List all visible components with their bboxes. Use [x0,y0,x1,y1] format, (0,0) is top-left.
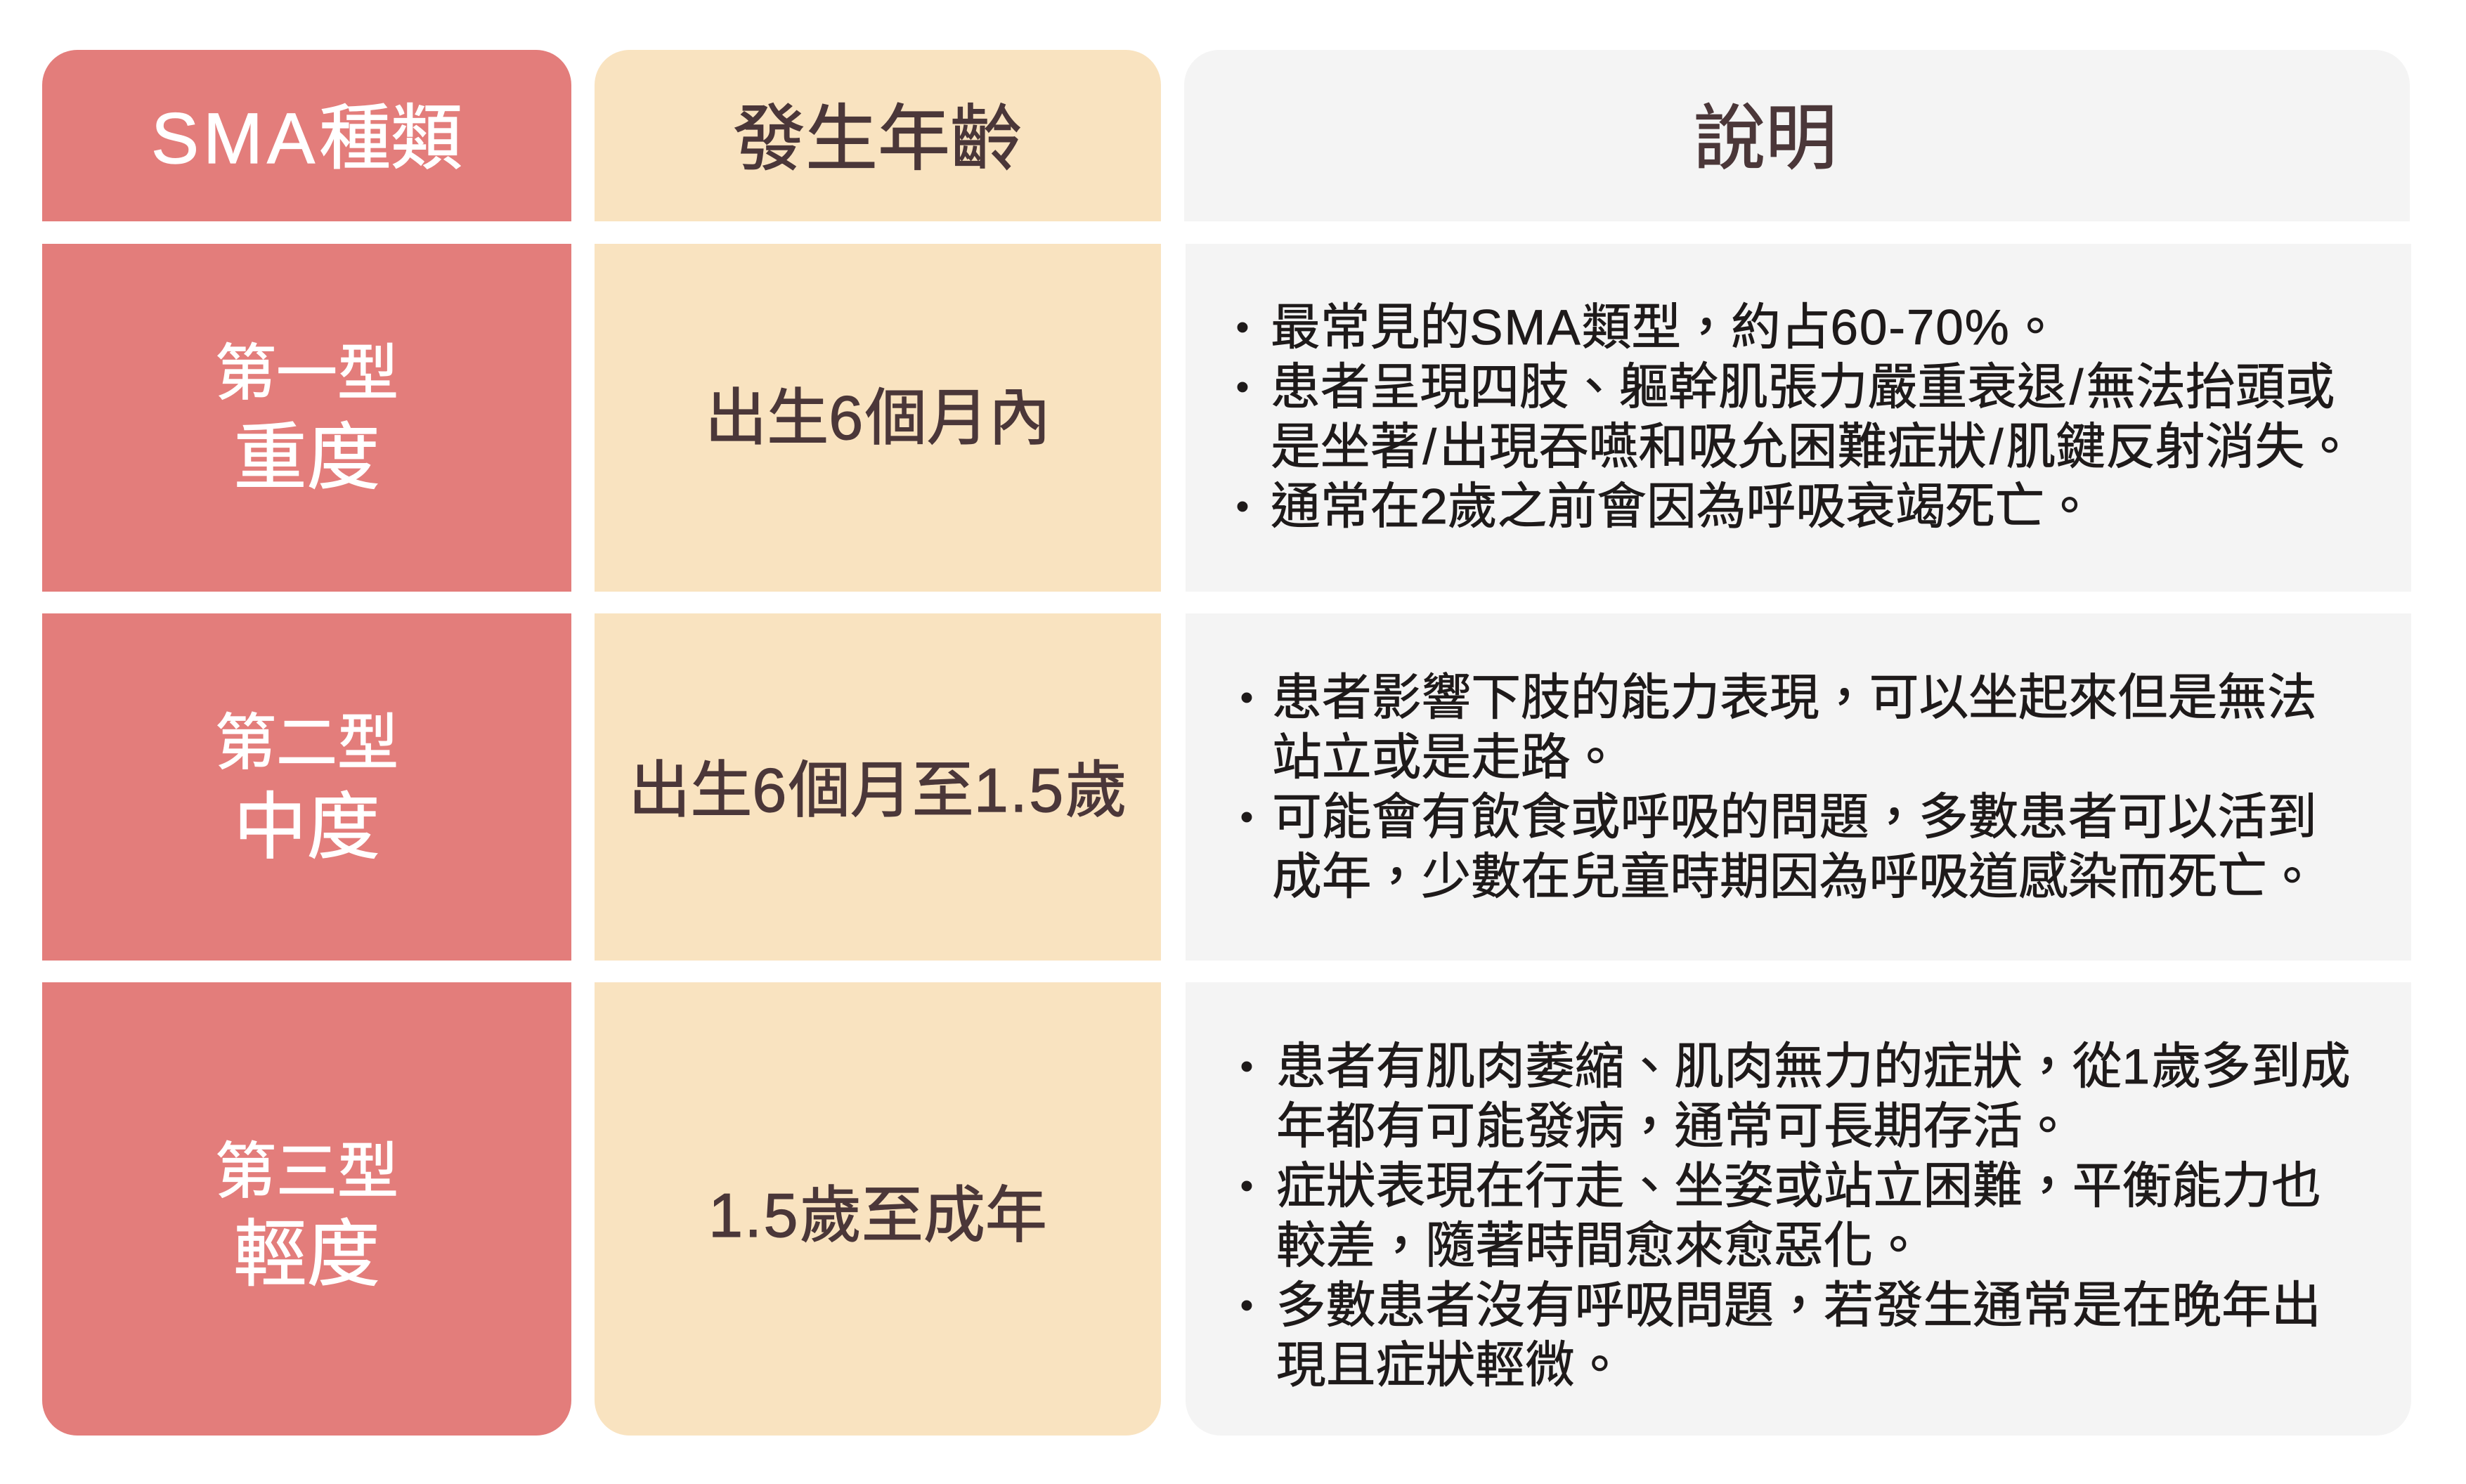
header: SMA types [42,50,571,221]
type 2 description text: 成年，少數在兒童時期因為呼吸道感染而死亡。 [1272,850,2317,905]
panel: type 3 description: • [1240,1046,1253,1087]
type 1 description text: 是坐著/出現吞嚥和吸允困難症狀/肌鍵反射消失。 [1271,419,2354,475]
type 1 age text: 出生6個月內 [705,383,1051,453]
type 1 severity: 重度 [233,417,379,499]
type 3 description text [1240,1039,2351,1393]
panel: type 1 label [42,244,571,592]
panel: type 2 description: • [1240,677,1253,718]
type 3 description text: 較差，隨著時間愈來愈惡化。 [1276,1218,1923,1274]
panel: type 2 age [595,613,1161,961]
heading: description: 說明 [1694,98,1837,178]
panel: type 3 description: • [1240,1285,1253,1326]
type 1 description text [1236,300,2354,535]
type 3 description text: 多數患者沒有呼吸問題，若發生通常是在晚年出 [1276,1278,2321,1334]
type 2 description text [1240,670,2317,905]
heading: SMA types: SMA種類 [151,98,462,178]
panel: type 3 description: • [1240,1166,1253,1206]
type 3 description text: 症狀表現在行走、坐姿或站立困難，平衡能力也 [1276,1159,2321,1214]
header: age of onset [595,50,1161,221]
type 3 age text: 1.5歲至成年 [708,1180,1047,1250]
panel: type 1 description: • [1236,307,1249,348]
type 3 name: 第三型 [215,1138,398,1206]
type 1 name: 第一型 [215,339,398,408]
panel: type 2 description: • [1240,797,1253,838]
type 3 description text: 現且症狀輕微。 [1276,1338,1625,1393]
type 2 name: 第二型 [215,709,398,777]
type 3 severity: 輕度 [233,1214,379,1296]
type 2 description text: 可能會有飲食或呼吸的問題，多數患者可以活到 [1272,790,2317,845]
header: description [1184,50,2410,221]
panel: type 3 age [595,982,1161,1436]
panel: type 2 label [42,613,571,961]
type 1 description text: 患者呈現四肢、軀幹肌張力嚴重衰退/無法抬頭或 [1271,360,2335,415]
panel: type 1 description [1186,244,2411,592]
panel: type 1 age [595,244,1161,592]
type 3 description text: 患者有肌肉萎縮、肌肉無力的症狀，從1歲多到成 [1276,1039,2351,1095]
type 2 severity: 中度 [233,787,379,868]
panel: type 3 description [1186,982,2411,1436]
panel: type 1 description: • [1236,486,1249,527]
panel: type 1 description: • [1236,367,1249,408]
panel: type 3 label [42,982,571,1436]
type 1 description text: 通常在2歲之前會因為呼吸衰竭死亡。 [1271,479,2094,535]
type 2 description text: 站立或是走路。 [1272,730,1621,786]
panel: type 2 description [1186,613,2411,961]
type 2 age text: 出生6個月至1.5歲 [628,755,1127,825]
type 1 description text: 最常見的SMA類型，約占60-70%。 [1271,300,2060,356]
type 2 description text: 患者影響下肢的能力表現，可以坐起來但是無法 [1272,670,2317,726]
heading: age of onset: 發生年齡 [733,98,1023,179]
type 3 description text: 年都有可能發病，通常可長期存活。 [1276,1099,2072,1154]
